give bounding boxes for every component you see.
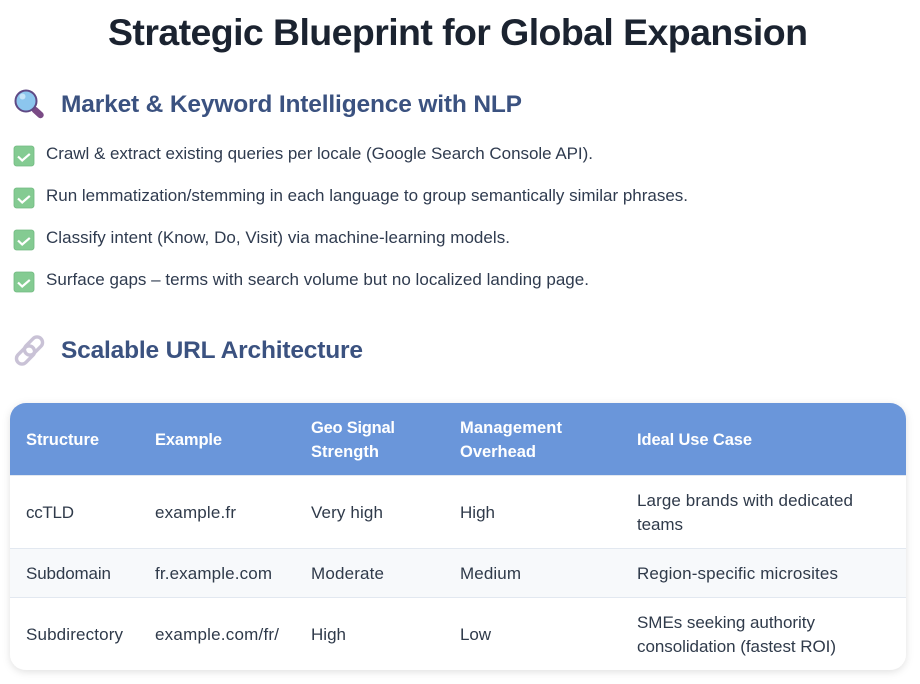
table row: subdomain xyxy=(26,564,838,583)
table row: ccTLD xyxy=(26,491,853,534)
table row: subdirectory: High xyxy=(311,625,346,644)
table header row: Ideal Use Case xyxy=(637,431,752,449)
table header row: Example xyxy=(155,431,222,449)
table row: subdirectory: consolidation (fastest ROI) xyxy=(637,637,836,656)
table header row: Overhead xyxy=(460,443,536,461)
table row: subdirectory: Low xyxy=(460,625,492,644)
table row: ccTLD: Large brands with dedicated xyxy=(637,491,853,510)
table header row: Management xyxy=(460,419,562,437)
table header row: Structure xyxy=(26,431,99,449)
table row: subdirectory: Subdirectory xyxy=(26,625,124,644)
title: Strategic Blueprint for Global Expansion xyxy=(108,11,808,53)
table row: subdomain: Moderate xyxy=(311,564,384,583)
list item 3: Classify intent (Know, Do, Visit) via machine-learning models. xyxy=(46,228,510,247)
panel: scalable url architecture xyxy=(10,335,906,670)
table header row: Strength xyxy=(311,443,379,461)
icon: magnifying glass xyxy=(16,90,40,115)
table header row xyxy=(26,419,752,461)
table row: subdirectory: example.com/fr/ xyxy=(155,625,279,644)
table row: ccTLD: teams xyxy=(637,515,683,534)
list item 4: Surface gaps – terms with search volume but no localized landing page. xyxy=(46,270,589,289)
table row: subdomain: Medium xyxy=(460,564,521,583)
table row: subdirectory: SMEs seeking authority xyxy=(637,613,816,632)
table row: ccTLD: ccTLD xyxy=(26,503,74,522)
table row: subdirectory xyxy=(26,613,836,656)
heading: scalable url architecture: Scalable URL Architecture xyxy=(61,337,363,364)
panel: market and keyword intelligence xyxy=(14,90,688,292)
list: research steps xyxy=(14,144,688,292)
table row: subdomain: Region-specific microsites xyxy=(637,564,838,583)
icon: chain link xyxy=(14,335,45,366)
table row: ccTLD: High xyxy=(460,503,495,522)
table row: subdomain: fr.example.com xyxy=(155,564,272,583)
table card xyxy=(10,403,906,670)
table row: ccTLD: example.fr xyxy=(155,503,236,522)
list item 2: Run lemmatization/stemming in each language to group semantically similar phrases. xyxy=(46,186,688,205)
heading: market and keyword intelligence: Market & Keyword Intelligence with NLP xyxy=(61,91,522,118)
list item 1: Crawl & extract existing queries per locale (Google Search Console API). xyxy=(46,144,593,163)
table header row: Geo Signal xyxy=(311,419,395,437)
table row: ccTLD: Very high xyxy=(311,503,383,522)
table row: subdomain: Subdomain xyxy=(26,564,111,583)
